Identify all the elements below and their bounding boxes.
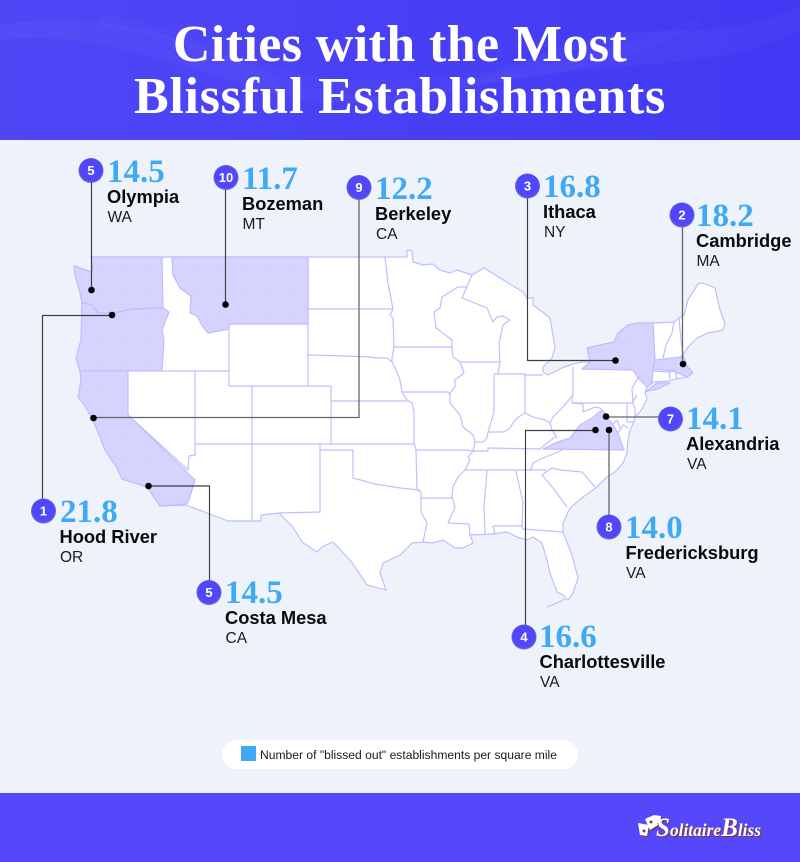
callout: 2 Cambridge <box>670 198 792 367</box>
city: Alexandria <box>686 433 780 454</box>
rank badge: 7 <box>667 412 674 426</box>
rank badge <box>214 165 238 190</box>
rank badge <box>31 498 56 524</box>
value: 14.5 <box>225 575 283 611</box>
marker <box>612 357 619 364</box>
leader line <box>90 180 92 290</box>
callout: 8 Fredericksburg <box>596 427 759 582</box>
marker <box>606 427 612 433</box>
state: MA <box>696 253 720 270</box>
state: NY <box>544 224 566 241</box>
city: Olympia <box>107 186 180 207</box>
state: MT <box>242 216 265 233</box>
rank badge: 9 <box>355 180 363 195</box>
map silhouette <box>74 250 725 600</box>
state borders <box>128 257 683 542</box>
rank badge: 3 <box>524 178 531 194</box>
rank badge <box>670 202 694 228</box>
value: 16.8 <box>543 169 601 205</box>
marker <box>88 287 95 293</box>
rank badge <box>658 406 683 432</box>
highlighted state: Massachusetts <box>653 355 693 377</box>
value: 18.2 <box>696 198 754 234</box>
rank badge: 1 <box>40 504 47 518</box>
state: VA <box>687 456 707 473</box>
marker <box>680 361 686 367</box>
city: Hood River <box>60 526 157 547</box>
value: 21.8 <box>60 494 118 530</box>
callout: 10 Bozeman <box>214 161 323 308</box>
legend swatch <box>241 746 256 761</box>
marker <box>222 301 229 308</box>
header banner <box>0 0 800 140</box>
callout: 5 Costa Mesa <box>145 483 327 647</box>
callout: 4 Charlottesville <box>512 427 665 691</box>
leader line <box>526 430 596 627</box>
long island <box>645 383 670 392</box>
city: Fredericksburg <box>626 542 759 563</box>
leader line <box>224 187 226 304</box>
callout: 7 Alexandria <box>603 401 780 473</box>
city: Ithaca <box>543 201 597 222</box>
value: 12.2 <box>375 171 433 207</box>
leader line <box>149 486 210 582</box>
rank badge <box>346 175 372 200</box>
rank badge: 4 <box>520 630 528 644</box>
state: CA <box>226 630 248 647</box>
highlighted state: Oregon <box>76 303 169 371</box>
leader line <box>606 416 660 418</box>
city: Charlottesville <box>540 651 665 672</box>
marker <box>603 413 609 420</box>
callout: 1 Hood River <box>31 312 157 566</box>
legend <box>222 740 578 769</box>
rank badge: 10 <box>219 170 233 185</box>
leader line <box>42 316 112 500</box>
callout: 5 Olympia <box>78 154 180 293</box>
state: VA <box>626 565 646 582</box>
value: 14.5 <box>107 154 165 190</box>
value: 16.6 <box>539 619 597 655</box>
city: Costa Mesa <box>225 607 327 628</box>
highlighted state: Virginia <box>543 410 624 450</box>
florida keys <box>547 599 565 607</box>
city: Bozeman <box>242 193 323 214</box>
state: WA <box>108 209 133 226</box>
marker <box>90 415 97 421</box>
leader line <box>608 430 610 517</box>
rank badge <box>512 624 536 650</box>
title: Cities with the Most <box>173 16 627 73</box>
state: CA <box>376 226 398 243</box>
city: Cambridge <box>696 230 792 251</box>
value: 11.7 <box>242 161 298 197</box>
highlighted state: Washington <box>74 257 163 313</box>
highlighted state: New York <box>582 323 655 387</box>
title: Blissful Establishments <box>134 68 666 125</box>
callout: 9 Berkeley <box>90 171 452 421</box>
value: 14.0 <box>625 510 683 546</box>
rank badge: 8 <box>605 520 613 534</box>
rank badge: 5 <box>87 163 95 178</box>
leader line <box>528 195 615 360</box>
state: OR <box>60 549 83 566</box>
highlighted state: California <box>78 371 195 506</box>
US map <box>74 250 725 607</box>
footer band <box>0 793 800 862</box>
city: Berkeley <box>375 203 452 224</box>
marker <box>592 427 599 433</box>
rank badge: 5 <box>205 585 213 600</box>
icon: playing cards <box>638 815 661 836</box>
marker <box>145 483 152 489</box>
callout: 3 Ithaca <box>515 169 619 364</box>
marker <box>109 312 115 318</box>
rank badge: 2 <box>678 208 686 222</box>
legend label: Number of "blissed out" establishments per square mile <box>260 748 557 762</box>
state: VA <box>540 674 560 691</box>
rank badge <box>515 174 540 198</box>
leader line <box>682 225 684 364</box>
highlighted state: Montana <box>172 257 308 333</box>
leader line <box>93 197 359 418</box>
rank badge <box>596 514 622 540</box>
logo wordmark: SolitaireBliss <box>656 813 761 842</box>
logo <box>638 813 761 842</box>
value: 14.1 <box>686 401 744 437</box>
rank badge <box>196 580 222 605</box>
